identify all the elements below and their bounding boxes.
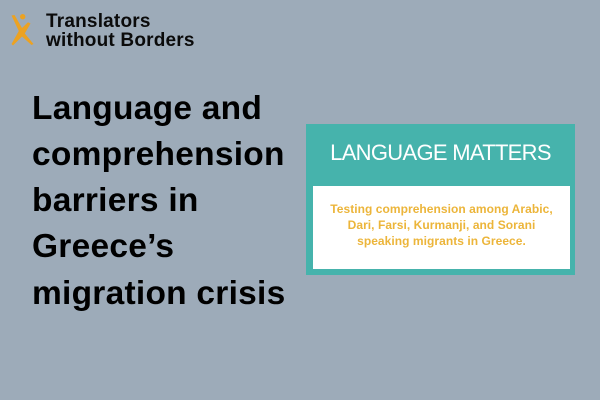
title: comprehension xyxy=(32,136,285,173)
description text: speaking migrants in Greece. xyxy=(357,234,526,248)
title: Greece’s xyxy=(32,228,174,265)
logo: Translators without Borders xyxy=(12,11,195,50)
title: Language and xyxy=(32,90,262,127)
text box: description xyxy=(313,186,570,269)
logo wordmark xyxy=(46,11,195,50)
description text: Testing comprehension among Arabic, xyxy=(330,202,553,216)
icon: orange figure xyxy=(12,14,34,46)
title: barriers in xyxy=(32,182,199,219)
title xyxy=(32,90,285,312)
panel: Language Matters xyxy=(306,124,575,275)
description text: Dari, Farsi, Kurmanji, and Sorani xyxy=(348,218,535,232)
title: migration crisis xyxy=(32,275,285,312)
logo wordmark: Translators xyxy=(46,11,151,32)
logo wordmark: without Borders xyxy=(46,30,195,50)
description text xyxy=(330,202,553,248)
panel heading: LANGUAGE MATTERS xyxy=(330,140,551,165)
